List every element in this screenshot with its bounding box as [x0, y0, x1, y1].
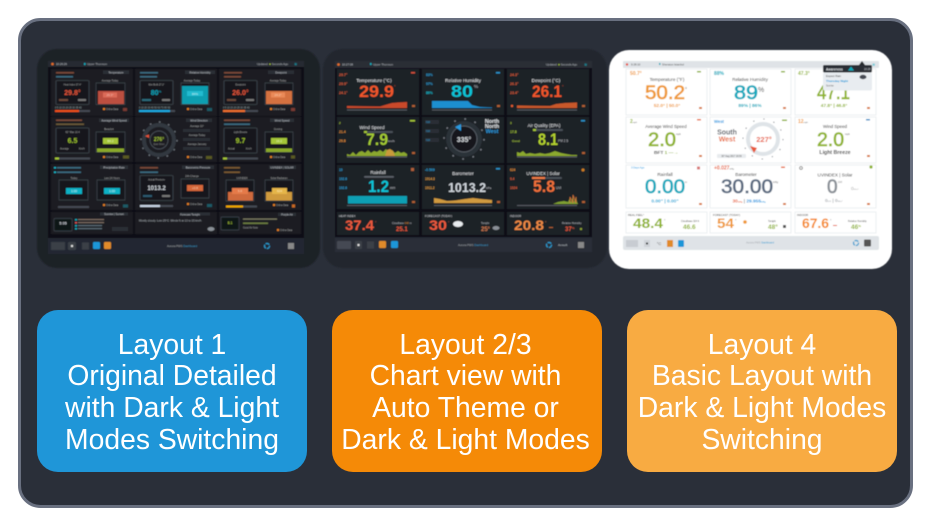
card: temperature: 52.0° | 50.0°: [654, 103, 680, 109]
card: wind speed: Light Breeze: [234, 131, 248, 134]
card: barometric pressure: Online Data: [190, 203, 203, 206]
card: rainfall chart: 10: [339, 168, 343, 172]
card: sunrise and sunset: 5:05: [59, 222, 67, 226]
card: sunrise and sunset: [51, 212, 133, 234]
card: dewpoint: Online Data: [273, 108, 286, 111]
card: wind speed: 2.0: [817, 130, 844, 151]
card: average wind speed: Km/h: [79, 148, 85, 150]
callout: awareness popup: [823, 61, 872, 90]
header bar: Updated: ■ Seconds Ago: [546, 62, 578, 66]
card: indoor: INDOOR: [510, 214, 521, 218]
card: heat index: [337, 212, 419, 235]
callout: layout 2/3: Layout 2/3: [399, 328, 532, 360]
card: heat index: °: [375, 221, 377, 225]
header bar: 10:27:08: [342, 62, 353, 66]
card: wind speed: Wind Speed: [823, 124, 848, 129]
card: precipitation rate: Precipitation Rate: [103, 165, 125, 169]
card: barometric pressure: Barometric Pressure: [186, 165, 211, 169]
card: wind compass: North: [485, 124, 499, 130]
card: uv index and solar: UVI: [838, 181, 842, 184]
card: purple air: 8.1: [228, 221, 232, 225]
card: temperature: 29.8°: [64, 89, 81, 97]
footer bar: Amsoft: [558, 243, 568, 247]
header bar: Upper Thomson: [87, 62, 107, 66]
header bar: [623, 61, 879, 68]
card: relative humidity: Online Data: [190, 108, 203, 111]
icon: cloud: [453, 221, 463, 227]
card: heat index: 25.1: [396, 227, 408, 233]
card: dewpoint chart: 24.3°: [510, 73, 519, 77]
header bar: ≋: [584, 62, 587, 67]
card: wind speed chart: [337, 117, 419, 163]
card: relative humidity: 80: [151, 90, 159, 97]
card: uv and solar chart: 624: [510, 168, 516, 172]
card: rainfall chart: mm: [390, 186, 396, 190]
card: forecast today: 25°: [481, 227, 491, 233]
card: wind compass: [422, 117, 504, 163]
card: temperature chart: 29.7°: [339, 73, 348, 77]
card: wind speed chart: 7.9: [366, 130, 388, 149]
card: uv index and solar: 0UVI | 0W/m²: [825, 198, 843, 204]
card: rainfall chart: Rainfall: [370, 170, 386, 175]
header bar: Updated: ■ Seconds Ago: [257, 62, 289, 66]
card: uv index and solar: [795, 165, 876, 208]
card: average wind speed: 2mph: [630, 119, 638, 125]
card: barometer chart: 1011.2: [425, 186, 435, 190]
card: barometer: Barometer: [735, 172, 757, 177]
callout: layout 2/3: Chart view with: [370, 359, 561, 391]
callout: layout 2/3: Auto Theme or: [372, 391, 559, 423]
card: wind direction: [710, 117, 791, 163]
card: forecast tonight: [135, 212, 217, 234]
header bar: 9:28:10: [631, 62, 641, 66]
card: wind speed chart: km/h: [388, 139, 395, 143]
card: purple air: Purple Air: [281, 212, 293, 216]
card: dewpoint: 0 5 10 15 20 25 30 35 40: [223, 106, 250, 110]
card: wind direction: Wind Direction: [190, 118, 208, 122]
card: barometer: 30.00: [721, 177, 773, 198]
card: average wind speed: BFT 1 —→: [654, 150, 678, 156]
card: indoor: [795, 212, 876, 233]
card: wind speed: Gusting: [274, 128, 283, 131]
card: forecast today: Tonight: [768, 220, 776, 223]
card: temperature: Heat Index 37.4°: [64, 84, 81, 86]
card: wind direction: West: [714, 119, 725, 124]
card: barometer chart: [422, 165, 504, 209]
card: real feel: Cloudbase 324 ft: [681, 220, 699, 223]
card: uv index and solar: UVINDEX | SOLAR: [270, 165, 294, 169]
card: rainfall: Rainfall: [657, 172, 673, 177]
card: uv index and solar: [219, 164, 301, 210]
card: barometer chart: 1014.3: [425, 177, 435, 181]
card: uv and solar chart: 5.8: [533, 177, 555, 196]
card: barometer: +0.027inHg: [714, 166, 735, 172]
callout: layout 4: Dark & Light Modes: [638, 391, 886, 423]
card: rainfall: 0.00: [645, 177, 685, 198]
compass dial: 335°: [457, 136, 471, 144]
footer bar: [335, 238, 592, 252]
card: relative humidity: Relative Humidity: [732, 77, 769, 82]
footer bar: Aurora PWS Dashboard: [458, 243, 488, 247]
card: wind speed: [219, 117, 301, 162]
card: temperature chart: 29.9°: [339, 82, 348, 86]
callout: layout 4: [627, 310, 897, 472]
card: rainfall chart: 1.2: [368, 177, 389, 196]
tablet: layout 1 screenshot: [37, 49, 320, 268]
card: air quality chart: 8.1: [538, 130, 558, 149]
header bar: ≋: [872, 62, 875, 67]
card: precipitation rate: Last 24 Hours: [104, 177, 121, 180]
card: average wind speed: 60° Max 10.4: [65, 131, 80, 134]
card: wind direction: Average Today: [189, 134, 206, 137]
tablet: layout 2/3 screenshot: [323, 49, 607, 268]
card: rainfall: [626, 165, 707, 208]
card: indoor: [507, 212, 589, 235]
card: humidity chart: %: [474, 84, 478, 89]
card: relative humidity: 89: [734, 83, 758, 104]
card: forecast today: FORECAST (TODAY): [713, 213, 740, 217]
header bar: Sheraton Istanbul: [662, 62, 684, 66]
card: wind speed: 16.2: [276, 139, 282, 143]
header bar: ≋: [294, 62, 297, 66]
card: wind compass: NW: [426, 121, 431, 124]
card: rainfall chart: 102.6: [339, 186, 347, 190]
card: indoor: %: [858, 224, 861, 228]
card: dewpoint chart: 26.3°: [510, 82, 519, 86]
card: precipitation rate: 1.00: [109, 189, 115, 193]
card: forecast today: °: [735, 219, 737, 223]
card: barometer chart: -0.509: [425, 168, 435, 172]
card: air quality chart: 3: [510, 121, 512, 125]
card: wind direction: South: [717, 130, 737, 136]
card: uv index and solar: Online Data: [276, 204, 289, 207]
card: average wind speed: Beaufort: [104, 128, 114, 131]
card: precipitation rate: Today: [71, 177, 78, 180]
card: air quality chart: Air Quality (EPA): [528, 123, 561, 128]
card: relative humidity: [135, 69, 217, 116]
card: dewpoint: 24.2°: [274, 93, 282, 97]
card: humidity chart: 80: [451, 82, 473, 101]
card: wind direction: West: [719, 136, 736, 144]
card: humidity chart: 97%: [426, 82, 433, 86]
card: temperature chart: Temperature (°C): [356, 78, 392, 83]
card: indoor: Relative Humidity: [562, 222, 582, 225]
card: relative humidity: 88%: [714, 71, 725, 77]
card: dewpoint: 47.3°: [798, 71, 810, 77]
card: temperature: 50.2: [645, 83, 685, 104]
card: heat index: Cloudbase 648 m: [392, 222, 412, 225]
card: forecast today: °: [448, 221, 450, 225]
card: dewpoint: 47.1: [817, 83, 850, 104]
card: dewpoint chart: [507, 69, 589, 115]
callout: layout 2/3: Dark & Light Modes: [341, 423, 590, 455]
card: uv index and solar: 0W/m²: [851, 186, 859, 192]
card: real feel: °: [664, 219, 666, 223]
card: relative humidity: 0 10 20 30 40 50 60 70 80 90: [139, 106, 171, 110]
card: wind speed: Online Data: [273, 156, 286, 159]
callout: layout 2/3: [332, 310, 602, 472]
tablet: layout 4 screenshot: [609, 50, 892, 269]
card: dewpoint: [795, 69, 876, 115]
card: barometer chart: Barometer: [452, 171, 474, 176]
card: wind speed: [795, 117, 876, 163]
card: heat index: 37.4: [345, 218, 375, 233]
card: dewpoint chart: Dewpoint (°C): [532, 78, 561, 83]
card: average wind speed: 6.5: [68, 138, 77, 145]
wind dial: [141, 122, 177, 158]
wind dial: East West: [154, 143, 165, 146]
card: wind speed: Km/h: [246, 148, 252, 150]
card: uv index and solar: UVINDEX: [236, 177, 248, 180]
card: precipitation rate: Online Data: [106, 204, 119, 207]
callout: layout 1: with Dark & Light: [64, 391, 279, 423]
card: forecast today: 30: [429, 218, 447, 233]
card: indoor: °: [830, 219, 832, 223]
card: real feel: 48.4: [633, 216, 664, 231]
card: forecast today: 48°: [768, 223, 778, 231]
card: barometric pressure: 24h Change: [185, 175, 199, 178]
callout: awareness popup: 16:28: [864, 67, 871, 71]
card: wind speed: mph: [845, 133, 850, 136]
callout: layout 1: Original Detailed: [67, 359, 277, 391]
card: dewpoint: Dewpoint: [275, 70, 287, 74]
card: uv index and solar: Solar Radiation: [270, 177, 288, 180]
card: precipitation rate: 1.00: [71, 189, 77, 193]
card: barometric pressure: [135, 164, 217, 210]
callout: layout 4: Layout 4: [708, 328, 816, 360]
callout: layout 4: Basic Layout with: [652, 359, 872, 391]
card: temperature: Temperature: [108, 70, 124, 74]
wind dial: 276°: [154, 137, 164, 143]
card: relative humidity: 84%: [192, 92, 198, 96]
card: indoor: 46: [851, 224, 858, 231]
card: purple air: Online Data: [280, 229, 293, 232]
callout: awareness popup: Sunrise: [826, 84, 835, 88]
card: average wind speed: Bft 2: [107, 139, 114, 143]
card: wind speed: 9.7: [236, 138, 245, 145]
card: wind compass: North: [485, 119, 499, 125]
card: indoor: 67.6: [802, 216, 829, 231]
card: real feel: 46.6: [683, 224, 696, 231]
card: temperature chart: [337, 69, 419, 115]
card: temperature chart: 29.9: [359, 82, 394, 101]
footer bar: °C: [657, 241, 661, 246]
card: uv and solar chart: [507, 165, 589, 209]
card: wind direction: Average 10°: [190, 125, 204, 128]
card: forecast tonight: Forecast Tonight: [180, 212, 200, 216]
card: wind speed: 12mph: [798, 119, 809, 125]
card: temperature: [51, 69, 133, 116]
footer bar: [623, 236, 879, 250]
card: average wind speed: [626, 117, 707, 163]
card: dewpoint: 47.8° | 46.8°: [821, 103, 847, 109]
callout: awareness popup: Awareness: [826, 68, 843, 72]
card: temperature: Average Today: [102, 80, 119, 83]
card: average wind speed: 2.0: [648, 130, 676, 151]
card: barometer chart: 1013.2: [448, 180, 486, 195]
card: indoor: Relative Humidity: [848, 220, 867, 223]
card: wind compass: West: [486, 129, 499, 135]
card: wind direction: Online Data: [190, 156, 203, 159]
card: temperature: Temperature (°F): [650, 77, 685, 82]
card: dewpoint: 26.0°: [232, 89, 249, 97]
card: humidity chart: Relative Humidity: [445, 78, 482, 83]
callout: awareness popup: Expect Rain: [826, 74, 842, 78]
card: wind speed: Light Breeze: [819, 150, 851, 156]
footer bar: [48, 238, 304, 254]
card: real feel: [626, 212, 707, 233]
card: uv index and solar: 624: [277, 189, 282, 193]
card: temperature chart: °: [394, 84, 396, 89]
card: humidity chart: 80%: [426, 91, 433, 95]
card: air quality chart: [507, 117, 589, 163]
card: rainfall: 0.00" | 0.00": [651, 198, 679, 204]
card: rainfall chart: [337, 165, 419, 209]
card: relative humidity: %: [758, 87, 764, 94]
card: uv index and solar: 5.8: [238, 189, 242, 193]
card: barometer: 30inHg | 29.955inHg: [733, 198, 766, 204]
card: indoor: °: [545, 221, 547, 225]
callout: layout 1: [37, 310, 307, 472]
card: temperature: 50.7°: [630, 71, 642, 77]
card: dewpoint: Dewpoint: [236, 84, 246, 86]
card: wind speed: Actual: [228, 148, 235, 150]
card: air quality chart: PM 2.5: [558, 139, 568, 143]
card: temperature: 0 5 10 15 20 25 30 35 40: [55, 106, 82, 110]
card: rainfall chart: 102.6: [339, 177, 347, 181]
card: temperature chart: 24.1°: [339, 91, 348, 95]
card: precipitation rate: [51, 164, 133, 210]
card: wind speed: Wind Speed: [275, 118, 290, 122]
card: wind compass: NW: [426, 139, 431, 142]
card: relative humidity: Average Today: [184, 80, 201, 83]
compass dial: 227°: [756, 135, 772, 144]
card: dewpoint chart: °: [562, 84, 564, 89]
card: uv and solar chart: 9.4: [510, 177, 515, 181]
card: indoor: 37: [565, 227, 572, 233]
card: rainfall: in: [685, 180, 688, 184]
card: wind speed chart: 29.8: [339, 139, 346, 143]
card: forecast tonight: Mostly cloudy. Low 25°C. Winds N at 10 to 15 km/h.: [139, 218, 202, 222]
card: average wind speed: Average Wind Speed: [101, 118, 127, 122]
card: air quality chart: Good: [512, 139, 520, 143]
card: forecast today: [710, 212, 791, 233]
card: wind direction: Average January: [188, 143, 207, 146]
card: uv index and solar: UVINDEX | Solar: [818, 172, 853, 178]
card: wind speed chart: 2: [339, 121, 341, 125]
card: humidity chart: [422, 69, 504, 115]
card: sunrise and sunset: Sunrise | Sunset: [104, 212, 124, 216]
callout: layout 1: Modes Switching: [65, 423, 279, 455]
card: uv and solar chart: 1024: [510, 186, 517, 190]
card: uv index and solar: 0: [827, 177, 838, 198]
card: uv and solar chart: UVI: [556, 186, 561, 190]
card: rainfall: 3 Days Ago: [631, 166, 645, 170]
card: heat index: HEAT INDEX: [339, 214, 356, 218]
callout: layout 1: Layout 1: [118, 328, 226, 360]
card: temperature: 29.3°: [106, 93, 114, 97]
card: barometric pressure: 1013.2: [147, 186, 166, 192]
card: humidity chart: 83%: [426, 73, 433, 77]
card: average wind speed: Online Data: [106, 156, 119, 159]
card: wind direction: [135, 117, 217, 162]
card: indoor: 20.8: [514, 218, 545, 233]
card: average wind speed: Average: [60, 148, 70, 150]
header bar: [335, 61, 592, 68]
card: dewpoint: [219, 69, 301, 116]
card: forecast today: FORECAST (TODAY): [425, 214, 452, 218]
card: indoor: INDOOR: [797, 213, 808, 217]
card: purple air: Good Air Now: [243, 226, 258, 230]
card: barometer: inHg: [773, 181, 779, 184]
card: relative humidity: Wet Bulb 27.2°: [149, 84, 165, 86]
card: relative humidity: [710, 69, 791, 115]
card: forecast today: 54: [717, 216, 735, 231]
card: temperature: [626, 69, 707, 115]
card: uv and solar chart: UVINDEX | Solar: [526, 171, 560, 176]
callout: layout 4: Switching: [701, 423, 823, 455]
card: temperature: °: [685, 87, 687, 93]
callout: awareness popup: Thursday Night: [826, 79, 848, 83]
card: relative humidity: Relative Humidity: [190, 70, 211, 74]
card: barometer: [710, 165, 791, 208]
footer bar: Aurora PWS Dashboard: [746, 240, 774, 244]
card: dewpoint chart: 26.1: [532, 82, 562, 101]
card: barometric pressure: Actual Pressure: [148, 178, 166, 182]
card: dewpoint: Average Today: [270, 80, 287, 83]
card: forecast today: [422, 212, 504, 235]
card: air quality chart: 17.8: [510, 130, 517, 134]
card: barometer chart: hPa: [486, 186, 492, 190]
card: forecast today: Tonight: [481, 222, 489, 225]
card: indoor: %: [572, 226, 575, 230]
header bar: [48, 61, 304, 67]
card: temperature: Online Data: [106, 108, 119, 111]
card: wind speed chart: 21.4: [339, 130, 346, 134]
card: average wind speed: [51, 117, 133, 162]
card: dewpoint chart: 23.4°: [510, 91, 519, 95]
footer bar: Aurora PWS Dashboard: [167, 244, 197, 248]
card: average wind speed: Average Wind Speed: [645, 124, 687, 129]
card: wind compass: NW: [426, 130, 431, 133]
header bar: Upper Thomson: [373, 62, 393, 66]
card: real feel: REAL FEEL°: [628, 213, 644, 217]
card: relative humidity: %: [159, 90, 162, 94]
header bar: 10:26:26: [56, 62, 67, 66]
card: average wind speed: mph: [676, 133, 681, 136]
card: purple air: [219, 212, 301, 234]
card: relative humidity: 89% | 86%: [738, 103, 762, 109]
card: wind speed chart: Wind Speed: [359, 125, 385, 130]
card: barometric pressure: +0.8: [192, 186, 198, 190]
card: wind direction: 30° Aug 2017 16:56: [721, 155, 742, 158]
